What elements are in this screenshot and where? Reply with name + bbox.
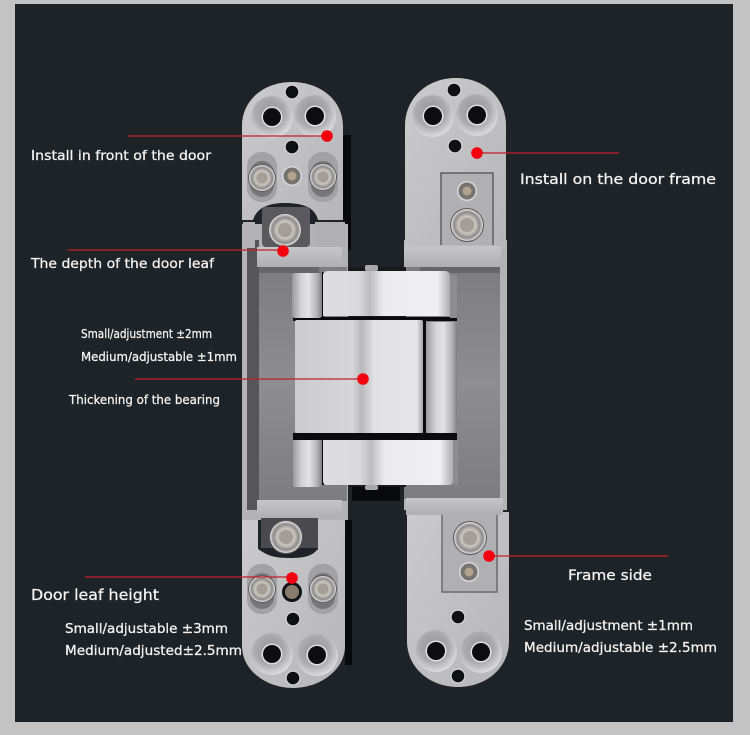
hinge illustration [242,78,509,688]
callout: frame side [483,550,717,656]
callout: frame side: Small/adjustment ±1mm [524,619,693,634]
top brackets [257,246,501,273]
left leaf frame channel [242,135,352,665]
callout: install on the door frame: Install on the door frame [520,172,716,188]
callout: install on the door frame [471,147,716,188]
callout: door leaf height: Small/adjustable ±3mm [65,622,228,637]
callout: thickening of the bearing: Thickening of the bearing [68,393,220,407]
panel: lower right plate [407,512,509,687]
callout: depth of the door leaf [30,245,289,272]
callout: thickening of the bearing: Small/adjustment ±2mm [81,327,212,341]
callout: frame side: Frame side [568,568,652,584]
callout: thickening of the bearing [68,327,369,407]
callout: install in front of the door: Install in front of the door [31,149,212,164]
hinge knuckles [292,265,458,490]
right leaf frame channel [348,240,507,510]
callout: frame side: Medium/adjustable ±2.5mm [524,641,717,656]
panel: top right plate [405,78,506,250]
callout: install in front of the door [31,130,333,164]
callout: door leaf height [31,572,298,659]
callout: door leaf height: Door leaf height [31,586,159,604]
callout: door leaf height: Medium/adjusted±2.5mm [65,644,242,659]
callout: depth of the door leaf: The depth of the door leaf [30,257,214,272]
callout: thickening of the bearing: Medium/adjustable ±1mm [81,350,237,364]
lower brackets [257,487,503,518]
panel: top left plate [242,82,345,248]
panel: lower left plate [242,518,345,688]
